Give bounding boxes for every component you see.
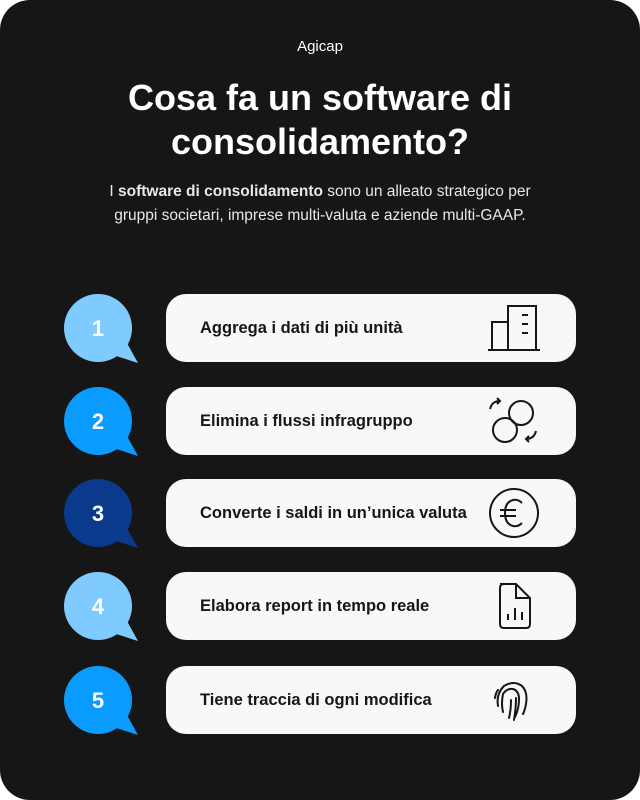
- bubble 1: 1: [92, 316, 104, 341]
- title: Cosa fa un software di: [128, 77, 512, 118]
- bubble 5: [64, 666, 138, 735]
- subtitle: [109, 183, 531, 224]
- bubble 3: [64, 479, 138, 548]
- bubble 4: [64, 572, 138, 641]
- card 2: Elimina i flussi infragruppo: [200, 412, 413, 430]
- card 1: Aggrega i dati di più unità: [200, 319, 403, 337]
- title: consolidamento?: [171, 121, 469, 162]
- logo: Agicap: [297, 38, 343, 55]
- card 4: [166, 572, 576, 640]
- bubble 2: [64, 387, 138, 456]
- bubble 4: 4: [92, 594, 105, 619]
- bubble 3: 3: [92, 501, 104, 526]
- subtitle: gruppi societari, imprese multi-valuta e aziende multi-GAAP.: [114, 207, 526, 224]
- card 5: Tiene traccia di ogni modifica: [200, 691, 432, 709]
- subtitle: I software di consolidamento sono un alleato strategico per: [109, 183, 531, 200]
- card 4: Elabora report in tempo reale: [200, 597, 429, 615]
- bubble 5: 5: [92, 688, 104, 713]
- card 1: [166, 294, 576, 362]
- card 5: [166, 666, 576, 734]
- bubble 1: [64, 294, 138, 363]
- bubble 2: 2: [92, 409, 104, 434]
- card 3: [166, 479, 576, 547]
- card 3: Converte i saldi in un’unica valuta: [200, 504, 467, 522]
- card 2: [166, 387, 576, 455]
- title: [128, 77, 512, 162]
